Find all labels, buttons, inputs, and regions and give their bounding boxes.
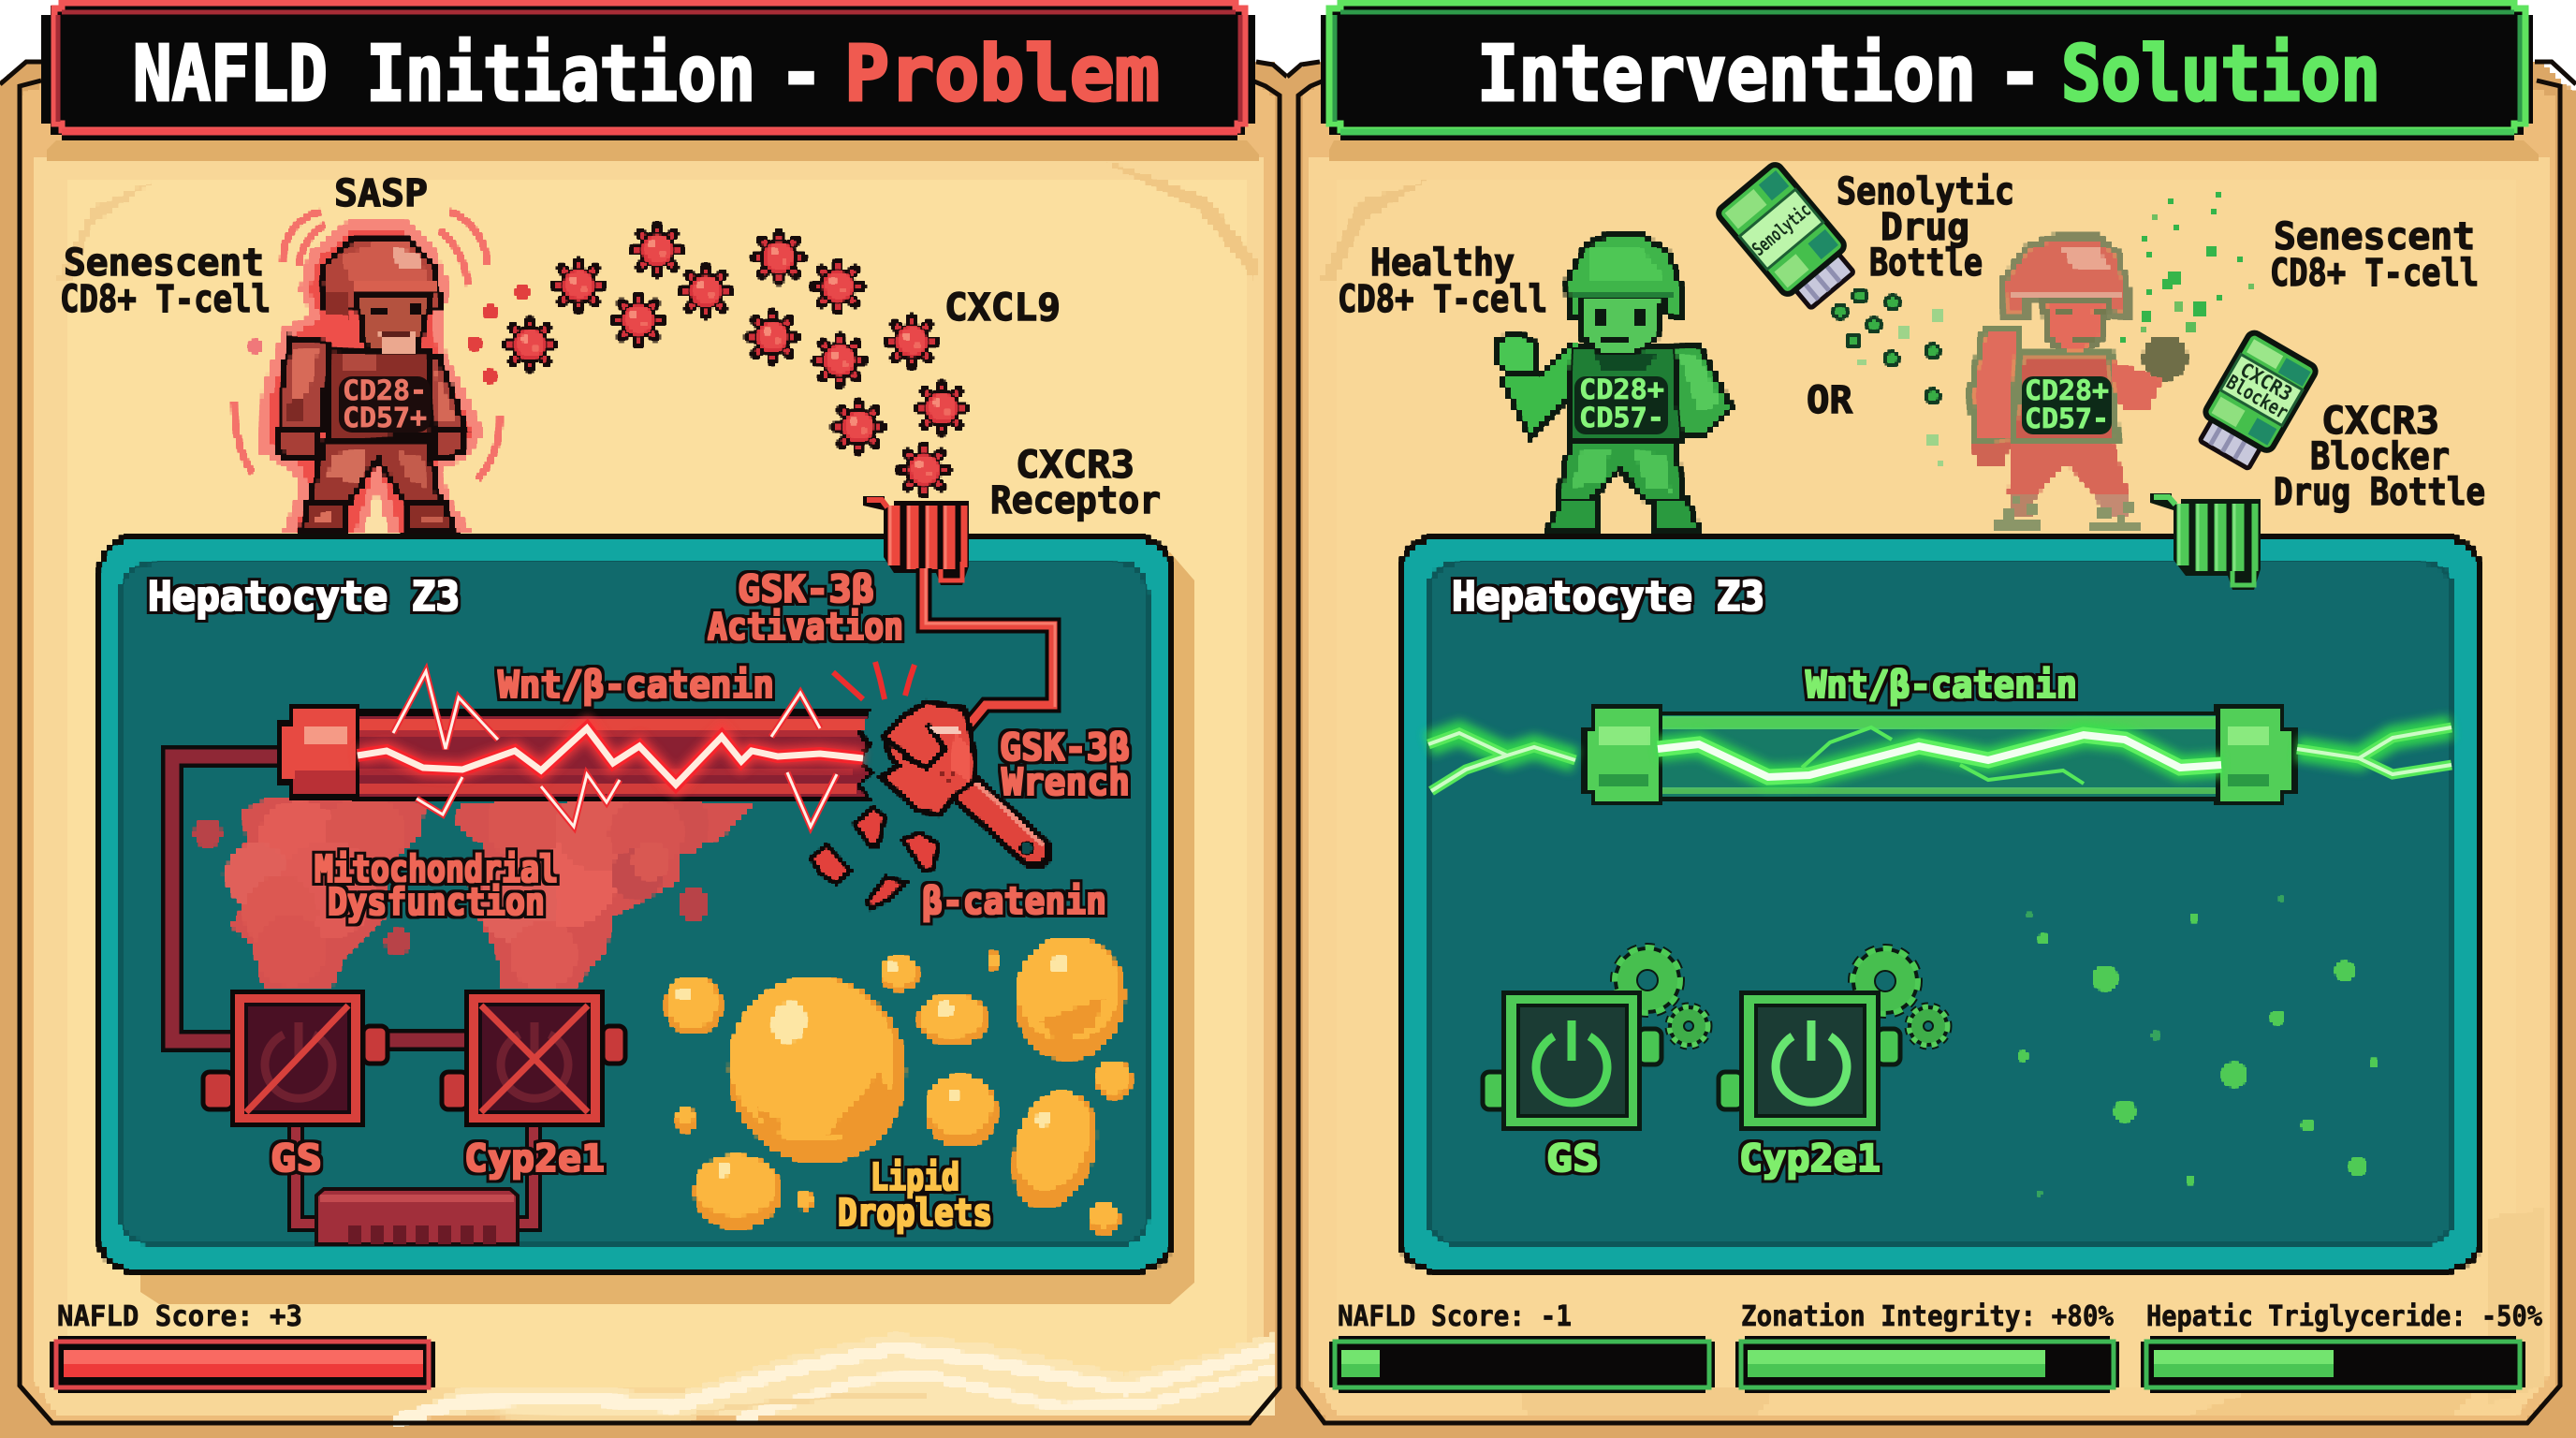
red aura <box>259 220 484 531</box>
panel: right solution background <box>1287 60 2576 1438</box>
label: β-catenin: β-catenin <box>922 880 1106 923</box>
panel: left problem background <box>0 60 1288 1438</box>
face <box>1578 298 1662 354</box>
label: Senescent CD8+ T-cell <box>60 242 271 321</box>
title bar: left <box>41 0 1259 161</box>
icon: CXCR3 blocker drug bottle: Blocker <box>2222 371 2292 424</box>
label: GS: GS <box>271 1137 322 1181</box>
label: CXCR3 Blocker Drug Bottle: Blocker <box>2310 435 2450 478</box>
title dash: - <box>1998 30 2042 119</box>
electric signal <box>358 671 863 827</box>
label: Senescent CD8+ T-cell right <box>2270 215 2479 295</box>
title text: Problem: Problem <box>844 30 1160 119</box>
label: Senescent CD8+ T-cell: Senescent <box>64 242 264 285</box>
icon: CXCR3 blocker drug bottle <box>2190 330 2319 474</box>
label: GSK-3β Wrench: GSK-3β <box>1000 726 1130 770</box>
face <box>356 293 432 353</box>
helmet <box>1567 236 1682 316</box>
particles: CXCL9 chemokines <box>248 227 965 493</box>
raised arm and fist <box>1516 354 1587 406</box>
label: CXCR3 Blocker Drug Bottle: CXCR3 <box>2321 400 2439 443</box>
chip: downstream block <box>316 1189 518 1244</box>
pathway: broken Wnt/β-catenin tube <box>277 664 874 827</box>
icon: CXCR3 blocker drug bottle: CXCR3 <box>2236 358 2296 405</box>
particles: senolytic drug pellets <box>1834 289 1943 466</box>
label: Senescent CD8+ T-cell: CD8+ T-cell <box>60 278 271 321</box>
label: Senolytic Drug Bottle: Senolytic <box>1837 170 2014 213</box>
electric signal <box>1428 727 2452 791</box>
badge: CD28+ CD57- <box>1574 374 1668 434</box>
other arm <box>1671 346 1732 435</box>
label: OR: OR <box>1807 379 1853 422</box>
label: CXCR3 Receptor: CXCR3 <box>1016 444 1134 487</box>
pathway: healthy Wnt/β-catenin tube <box>1428 664 2452 805</box>
label: Healthy CD8+ T-cell <box>1338 242 1547 321</box>
pipes: enzymes to chip <box>296 1123 534 1224</box>
dissolve specks <box>1994 496 2141 531</box>
badge: CD28- CD57+: CD28- <box>343 374 427 406</box>
icon: senolytic drug bottle <box>1716 162 1863 315</box>
character: dissolving senescent T-cell <box>1970 237 2188 531</box>
impact sparks <box>833 662 915 699</box>
label: Mitochondrial Dysfunction <box>315 848 558 924</box>
enzyme: Cyp2e1 active <box>1719 950 1947 1181</box>
label: SASP: SASP <box>334 172 428 215</box>
label: Wnt/β-catenin: Wnt/β-catenin <box>498 664 774 707</box>
label: Senolytic Drug Bottle <box>1837 170 2014 285</box>
label: Lipid Droplets <box>838 1156 992 1235</box>
label: CXCR3 Blocker Drug Bottle <box>2274 400 2485 514</box>
title bar: right <box>1321 0 2539 161</box>
score: NAFLD Score +3 <box>50 1300 435 1393</box>
label: Senolytic Drug Bottle: Bottle <box>1869 242 1983 285</box>
score: Zonation Integrity +80%: Zonation Integrity: +80% <box>1741 1300 2114 1333</box>
score: Zonation Integrity +80% <box>1735 1300 2119 1393</box>
lipid droplets <box>665 925 1139 1235</box>
score: NAFLD Score -1: NAFLD Score: -1 <box>1338 1300 1572 1333</box>
score: NAFLD Score +3: NAFLD Score: +3 <box>57 1300 302 1333</box>
title text: Intervention: Intervention <box>1477 30 1976 119</box>
badge: CD28+ CD57- faded: CD57- <box>2025 403 2109 434</box>
label: Senescent CD8+ T-cell right: Senescent <box>2274 215 2475 258</box>
label: GS: GS <box>1546 1137 1599 1181</box>
label: Lipid Droplets: Droplets <box>838 1192 992 1235</box>
enzyme: GS active <box>1483 949 1707 1181</box>
label: Healthy CD8+ T-cell: Healthy <box>1370 242 1515 285</box>
pipe: Wnt tube to enzymes <box>172 756 468 1041</box>
label: GSK-3β Activation: Activation <box>708 606 903 649</box>
label: Wnt/β-catenin: Wnt/β-catenin <box>1806 664 2077 707</box>
legs <box>1558 442 1683 500</box>
title text: Solution: Solution <box>2061 30 2380 119</box>
badge: CD28+ CD57- faded <box>2022 374 2112 434</box>
icon: GSK-3β wrench <box>833 662 1043 855</box>
label: CXCL9: CXCL9 <box>944 286 1061 330</box>
panel: hepatocyte cell left <box>97 532 1194 1304</box>
badge: CD28- CD57+ <box>339 374 431 433</box>
label: Hepatocyte Z3 right: Hepatocyte Z3 <box>1452 573 1764 621</box>
score: Hepatic Triglyceride -50% <box>2141 1300 2542 1393</box>
label: Hepatocyte Z3: Hepatocyte Z3 <box>148 573 460 621</box>
character: healthy CD8+ T-cell soldier <box>1495 236 1732 530</box>
smoke: mitochondrial dysfunction plumes <box>194 785 755 989</box>
label: CXCR3 Blocker Drug Bottle: Drug Bottle <box>2274 471 2485 514</box>
label: CXCR3 Receptor <box>990 444 1161 522</box>
helmet <box>320 237 440 309</box>
label: GSK-3β Activation: GSK-3β <box>738 568 874 611</box>
label: Healthy CD8+ T-cell: CD8+ T-cell <box>1338 278 1547 321</box>
badge: CD28+ CD57-: CD28+ <box>1579 374 1664 405</box>
fragments: β-catenin shards <box>812 808 1106 923</box>
torso <box>1569 348 1681 442</box>
label: Cyp2e1: Cyp2e1 <box>464 1137 605 1181</box>
label: Mitochondrial Dysfunction: Mitochondrial <box>315 848 558 891</box>
badge: CD28- CD57+: CD57+ <box>343 402 427 433</box>
torso and arms <box>281 337 330 433</box>
score: Hepatic Triglyceride -50%: Hepatic Triglyceride: -50% <box>2146 1300 2542 1333</box>
receptor: CXCR3 green <box>2150 493 2261 590</box>
label: CXCR3 Receptor: Receptor <box>990 479 1161 522</box>
arrow: GSK-3β activation signal <box>924 568 1055 727</box>
label: Senolytic Drug Bottle: Drug <box>1881 206 1969 249</box>
hands <box>277 431 316 457</box>
badge: CD28+ CD57- faded: CD28+ <box>2025 374 2109 406</box>
title text: NAFLD Initiation: NAFLD Initiation <box>133 30 755 119</box>
enzyme: GS offline <box>203 990 388 1181</box>
panel: hepatocyte cell right <box>1398 532 2482 1276</box>
label: Senescent CD8+ T-cell right: CD8+ T-cell <box>2270 252 2479 295</box>
legs <box>309 443 440 503</box>
label: GSK-3β Wrench: Wrench <box>1002 761 1130 804</box>
aura wave lines <box>234 212 500 479</box>
enzyme: Cyp2e1 offline <box>442 990 625 1181</box>
title dash: - <box>779 30 824 119</box>
score: NAFLD Score -1 <box>1329 1300 1715 1393</box>
badge: CD28+ CD57-: CD57- <box>1579 402 1664 433</box>
particles: green dissolve <box>2120 192 2254 343</box>
label: GSK-3β Activation <box>708 568 903 649</box>
icon: senolytic drug bottle: Senolytic <box>1748 198 1815 260</box>
label: GSK-3β Wrench <box>1000 726 1130 804</box>
label: Lipid Droplets: Lipid <box>871 1156 959 1199</box>
particles: cleared lipid remnants <box>2017 896 2378 1196</box>
label: Mitochondrial Dysfunction: Dysfunction <box>328 881 545 924</box>
label: Cyp2e1: Cyp2e1 <box>1739 1137 1881 1181</box>
receptor: CXCR3 red <box>863 496 969 585</box>
character: senescent CD8+ T-cell soldier <box>234 212 500 531</box>
